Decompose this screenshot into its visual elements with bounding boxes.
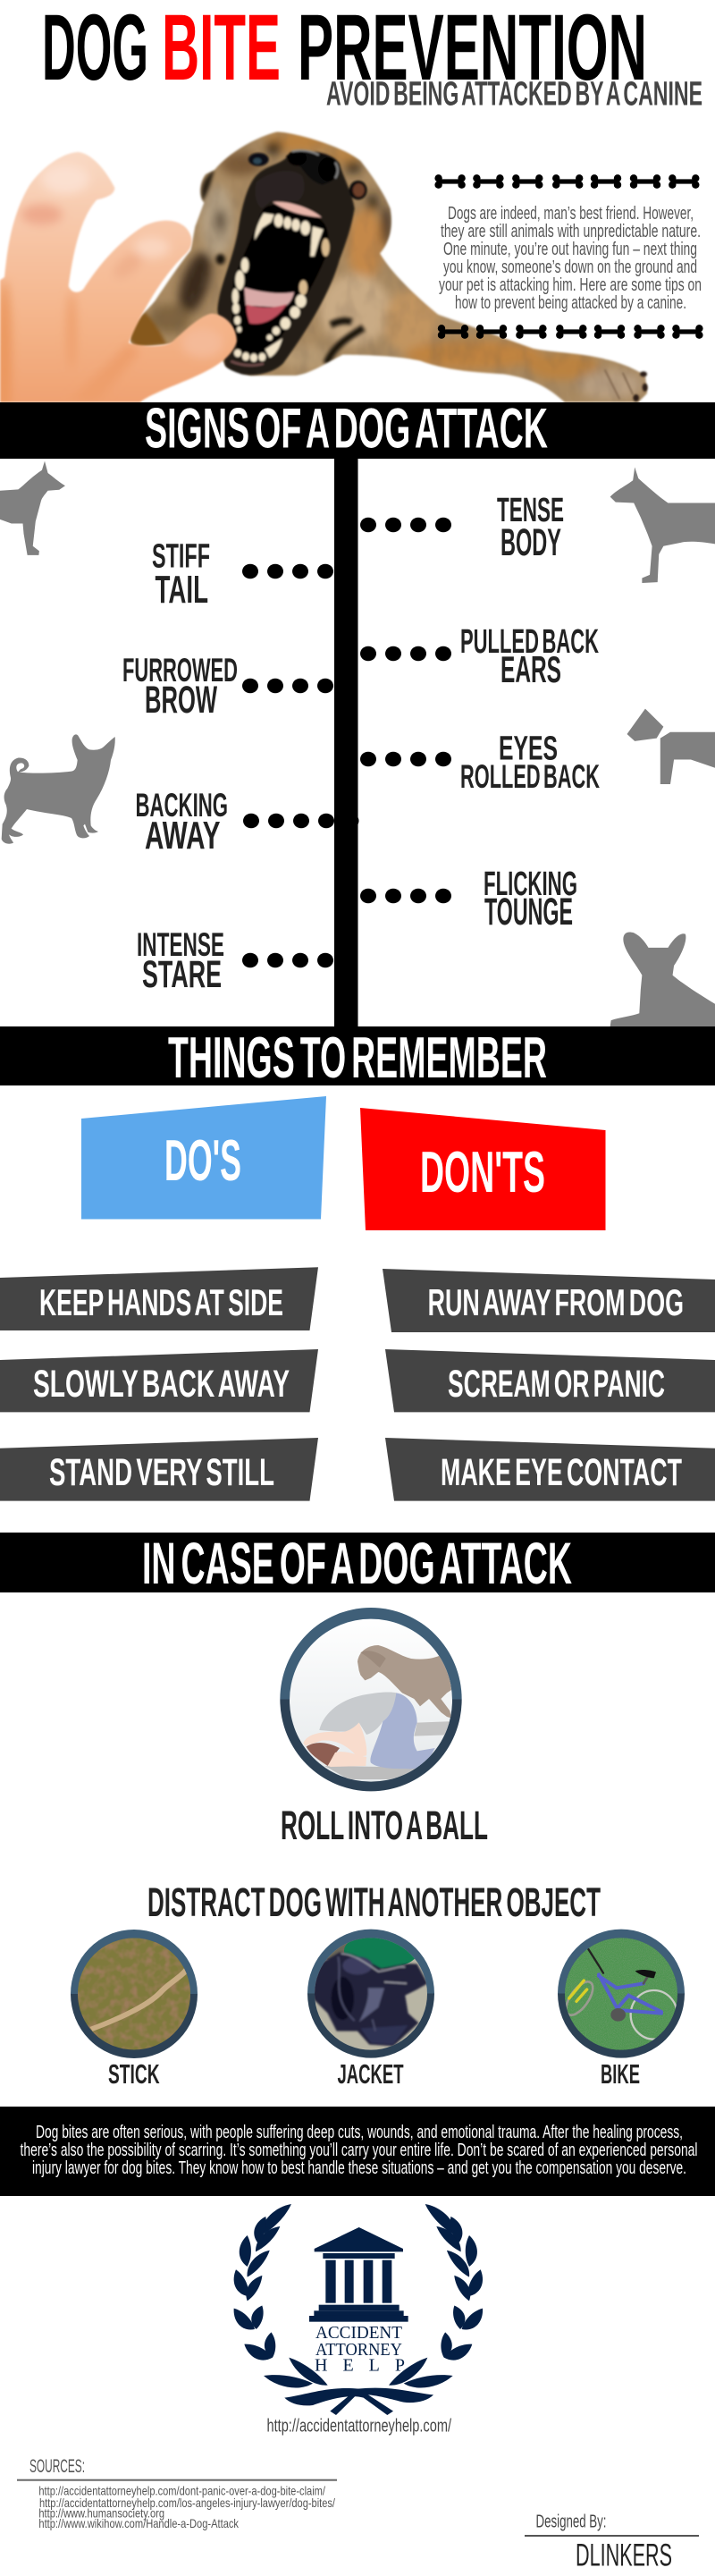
sign: flicking tounge: TOUNGE bbox=[484, 891, 573, 933]
nose bbox=[286, 151, 339, 185]
panel: do's bbox=[81, 1096, 326, 1220]
logo wordmark: ACCIDENT bbox=[315, 2323, 402, 2343]
hand bbox=[0, 152, 237, 423]
sign: furrowed brow: BROW bbox=[145, 679, 217, 722]
sign: tense body: BODY bbox=[500, 521, 561, 564]
sources: http://accidentattorneyhelp.com/los-angeles-injury-lawyer/dog-bites/ bbox=[39, 2496, 335, 2510]
caption: roll into a ball: ROLL INTO A BALL bbox=[281, 1803, 488, 1848]
sign: eyes rolled back: ROLLED BACK bbox=[460, 758, 600, 795]
silhouette: right geometric dog bbox=[627, 709, 715, 784]
do: slowly back away: SLOWLY BACK AWAY bbox=[33, 1363, 290, 1406]
logo wordmark: ATTORNEY bbox=[315, 2340, 402, 2360]
silhouette: top left dog bbox=[0, 461, 65, 555]
panel: closing statement bbox=[0, 2107, 715, 2196]
do: slowly back away bbox=[0, 1349, 318, 1412]
sign: flicking tounge bbox=[360, 866, 577, 933]
sign: tense body bbox=[360, 492, 564, 564]
sources: http://accidentattorneyhelp.com/dont-panic-over-a-dog-bite-claim/ bbox=[38, 2484, 325, 2498]
icon: jacket photo bbox=[307, 1930, 434, 2058]
caption: stick: STICK bbox=[108, 2058, 160, 2090]
hero image: snarling dog and hand bbox=[0, 125, 652, 423]
sign: tense body: TENSE bbox=[497, 492, 564, 529]
dog silhouettes bbox=[0, 461, 715, 1026]
silhouette: top right dog bbox=[610, 468, 715, 583]
sign: stiff tail: STIFF bbox=[152, 538, 210, 576]
icon: bike photo bbox=[558, 1930, 685, 2058]
eyes bbox=[248, 153, 269, 166]
tongue bbox=[244, 288, 294, 308]
sign: stiff tail: TAIL bbox=[156, 568, 208, 612]
silhouette: bottom right dog bbox=[610, 933, 715, 1026]
sign: pulled back ears bbox=[360, 623, 599, 690]
do: stand very still bbox=[0, 1438, 318, 1501]
sign: stiff tail bbox=[152, 538, 333, 612]
dog bbox=[116, 125, 652, 402]
silhouette: left small dog bbox=[2, 734, 115, 844]
center vertical bar bbox=[334, 459, 359, 1027]
sign: backing away bbox=[136, 787, 334, 857]
intro bones top bbox=[434, 174, 699, 189]
do: stand very still: STAND VERY STILL bbox=[49, 1451, 274, 1494]
sign: eyes rolled back: EYES bbox=[499, 730, 558, 767]
intro bones bottom bbox=[438, 325, 703, 339]
designer credit bbox=[525, 2513, 699, 2573]
logo courthouse bbox=[309, 2227, 408, 2322]
do: keep hands at side bbox=[0, 1267, 318, 1330]
gums bbox=[273, 202, 322, 217]
logo wordmark bbox=[315, 2323, 405, 2376]
designer credit: Designed By: bbox=[536, 2513, 606, 2532]
icon: stick photo bbox=[71, 1930, 198, 2058]
sign: flicking tounge: FLICKING bbox=[484, 866, 577, 903]
sign: pulled back ears: PULLED BACK bbox=[460, 623, 599, 661]
don't: run away from dog bbox=[383, 1269, 715, 1332]
muzzle bbox=[217, 151, 355, 375]
caption: jacket: JACKET bbox=[338, 2058, 404, 2090]
panel: do's: DO'S bbox=[164, 1128, 241, 1193]
icon: roll into a ball illustration bbox=[280, 1608, 462, 1791]
sources: http://www.wikihow.com/Handle-a-Dog-Attack bbox=[38, 2516, 240, 2530]
panel: don'ts: DON'TS bbox=[420, 1139, 545, 1204]
title bbox=[42, 0, 647, 100]
sign: intense stare: INTENSE bbox=[137, 926, 224, 963]
sign: backing away: AWAY bbox=[145, 814, 220, 857]
don't: make eye contact bbox=[385, 1438, 715, 1501]
sources: http://www.humansociety.org bbox=[38, 2505, 164, 2520]
sign: intense stare: STARE bbox=[142, 953, 222, 996]
paw toes bbox=[633, 371, 648, 401]
do: keep hands at side: KEEP HANDS AT SIDE bbox=[39, 1281, 283, 1323]
sources bbox=[17, 2456, 337, 2530]
sign: intense stare bbox=[137, 926, 333, 996]
logo wordmark: HELP bbox=[315, 2356, 405, 2376]
sign: eyes rolled back bbox=[360, 730, 600, 795]
logo: accident attorney help bbox=[228, 2199, 488, 2415]
don't: scream or panic bbox=[385, 1349, 715, 1412]
sign: furrowed brow: FURROWED bbox=[122, 652, 238, 688]
website url: http://accidentattorneyhelp.com/ bbox=[266, 2416, 451, 2436]
intro text bbox=[439, 204, 702, 313]
caption: bike: BIKE bbox=[601, 2058, 640, 2090]
sources: SOURCES: bbox=[29, 2456, 85, 2477]
teeth bbox=[232, 213, 330, 362]
logo laurel wreath bbox=[228, 2199, 488, 2415]
sign: pulled back ears: EARS bbox=[500, 648, 561, 690]
sign: backing away: BACKING bbox=[136, 787, 228, 823]
mouth cavity bbox=[231, 205, 328, 360]
sign: furrowed brow bbox=[122, 652, 333, 722]
panel: don'ts bbox=[360, 1108, 606, 1230]
